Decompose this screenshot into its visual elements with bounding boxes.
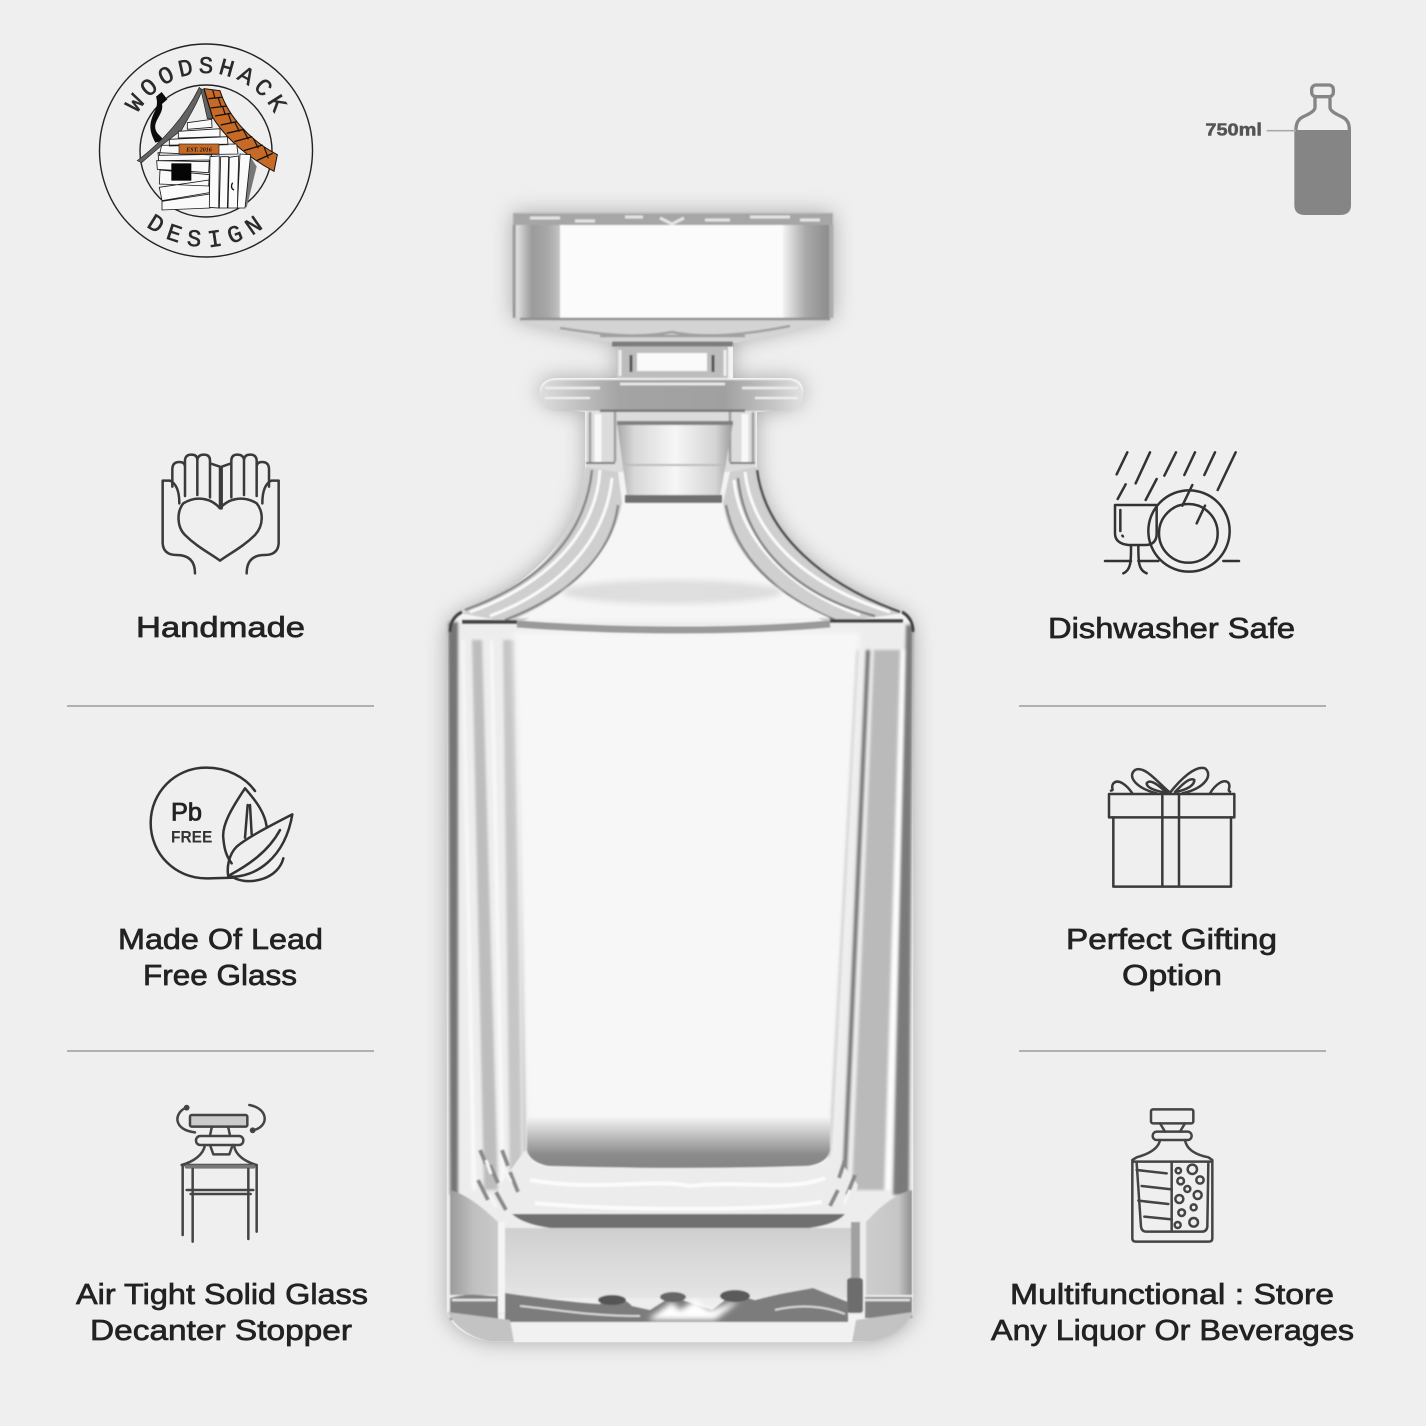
label: Perfect Gifting Option [1066, 924, 1277, 992]
capacity label: 750ml [1205, 119, 1262, 139]
label: Multifunctional Store Any Liquor Or Beverages: Any Liquor Or Beverages [991, 1315, 1354, 1347]
divider right bottom [1019, 1050, 1326, 1052]
icon: gift box [1109, 768, 1234, 887]
label: Made Of Lead Free Glass: Made Of Lead [118, 924, 323, 956]
label: Air Tight Solid Glass Decanter Stopper [76, 1279, 368, 1347]
divider right top [1019, 705, 1326, 707]
divider left top [67, 705, 374, 707]
label: Handmade: Handmade [136, 612, 305, 644]
FREE text: FREE [171, 828, 212, 847]
icon: 750ml bottle capacity [1205, 85, 1349, 213]
right ribs [827, 625, 913, 1195]
decanter solid base [447, 1190, 913, 1342]
label: Made Of Lead Free Glass: Free Glass [143, 960, 297, 992]
label: Air Tight Solid Glass Decanter Stopper: Air Tight Solid Glass [76, 1279, 368, 1311]
label: Multifunctional Store Any Liquor Or Beverages: Multifunctional : Store [1010, 1279, 1334, 1311]
logo sign text: EST. 2016 [185, 147, 212, 153]
icon: decanter multifunctional [1132, 1109, 1212, 1242]
logo: Woodshack Design [98, 43, 314, 258]
left ribs [448, 622, 527, 1195]
decanter shoulders [460, 467, 903, 624]
logo house illustration [137, 87, 277, 210]
label: Perfect Gifting Option: Option [1122, 960, 1222, 992]
decanter collar [540, 380, 803, 412]
product photo: glass decanter [447, 213, 913, 1342]
icon: hands holding heart [163, 455, 279, 573]
label: Perfect Gifting Option: Perfect Gifting [1066, 924, 1277, 956]
icon: lead free glass [151, 768, 292, 881]
label: Air Tight Solid Glass Decanter Stopper: Decanter Stopper [90, 1315, 352, 1347]
label: Made Of Lead Free Glass [118, 924, 323, 992]
divider left bottom [67, 1050, 374, 1052]
logo text: Woodshack: WOODSHACK [124, 56, 288, 114]
decanter stopper [513, 213, 833, 378]
Pb symbol: Pb [171, 798, 202, 826]
icon: dishwasher safe [1105, 452, 1239, 573]
icon: air tight stopper [177, 1105, 265, 1242]
decanter body with ribbed sides [447, 612, 913, 1315]
label: Multifunctional Store Any Liquor Or Beverages [991, 1279, 1354, 1347]
decanter inner floor [478, 1116, 858, 1229]
decanter neck and plug [586, 412, 756, 503]
label: Dishwasher Safe: Dishwasher Safe [1048, 613, 1295, 645]
logo text: Design: DESIGN [147, 214, 262, 248]
